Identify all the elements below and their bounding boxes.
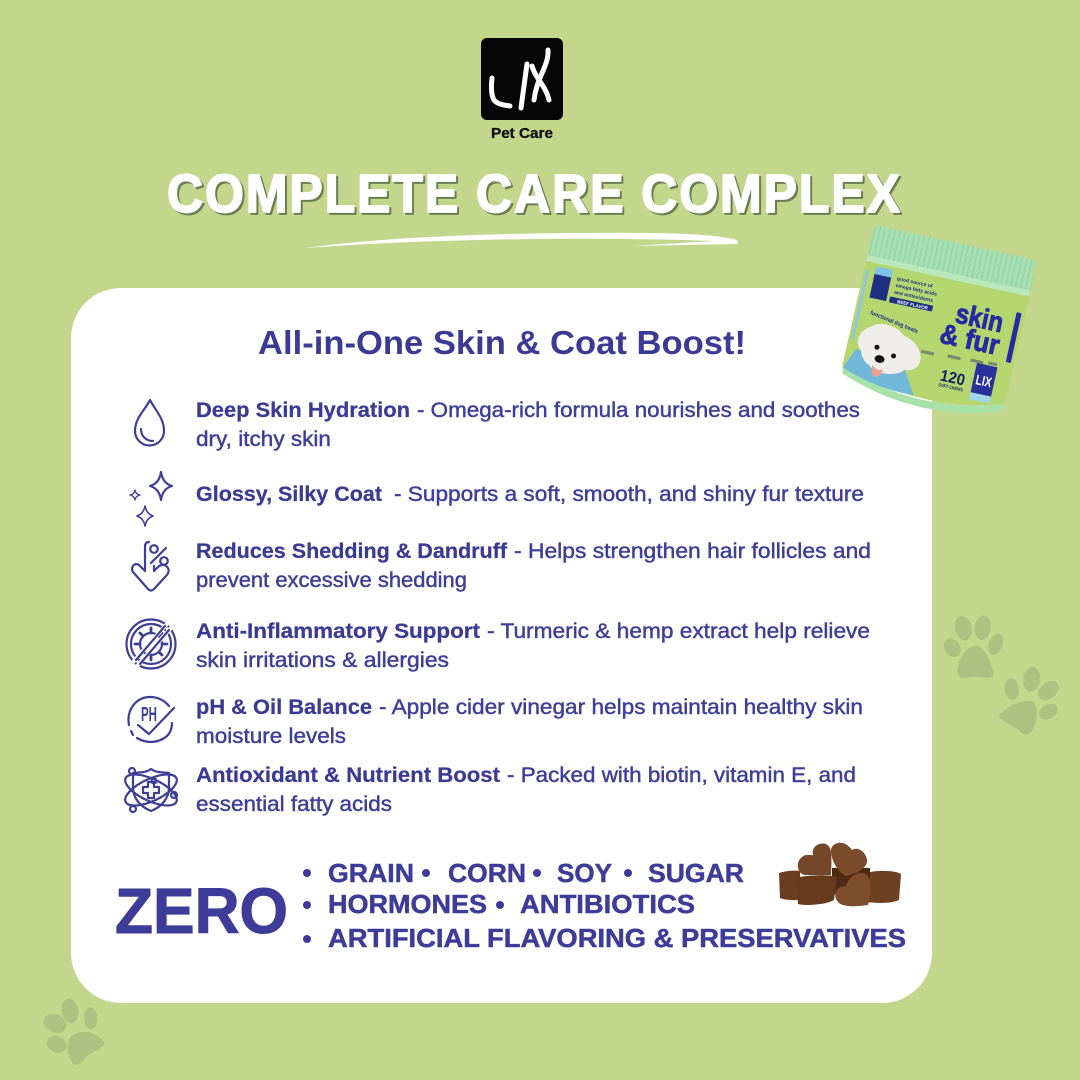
jar base xyxy=(837,365,1006,425)
benefit: anti-inflammatory: Anti-Inflammatory Support xyxy=(196,620,480,643)
icon: pH check xyxy=(129,697,174,742)
benefit: shedding: - Helps strengthen hair follicles and xyxy=(514,540,871,563)
benefit: pH balance: - Apple cider vinegar helps maintain healthy skin xyxy=(379,696,863,719)
paw print: right xyxy=(999,666,1062,735)
benefit: anti-inflammatory: skin irritations & allergies xyxy=(196,649,449,672)
benefit: pH balance: moisture levels xyxy=(196,725,346,748)
icon: no germs xyxy=(126,620,176,668)
benefit: antioxidant xyxy=(196,764,856,816)
jar label badge xyxy=(869,266,940,312)
benefit: glossy coat: Glossy, Silky Coat xyxy=(196,483,382,506)
jar logo xyxy=(969,363,997,404)
card xyxy=(71,288,932,1003)
jar side strip xyxy=(1006,312,1022,363)
jar body xyxy=(839,258,1030,416)
jar small claims xyxy=(921,347,997,369)
benefit: skin hydration: Deep Skin Hydration xyxy=(196,399,410,422)
benefit: antioxidant: - Packed with biotin, vitamin E, and xyxy=(507,764,856,787)
jar left label edge xyxy=(851,269,869,340)
jar label badge: omega fatty acids xyxy=(895,283,938,298)
benefit: glossy coat: - Supports a soft, smooth, and shiny fur texture xyxy=(394,483,864,506)
zero ingredient list: SUGAR xyxy=(648,858,744,888)
jar lid xyxy=(866,225,1037,297)
zero ingredient list: SOY xyxy=(557,858,612,888)
logo caption: Pet Care xyxy=(491,125,553,142)
jar product name: skin xyxy=(953,298,1006,338)
jar count: 120 xyxy=(939,368,967,390)
zero ingredient list: CORN xyxy=(448,858,526,888)
panel heading: All-in-One Skin & Coat Boost! xyxy=(258,324,746,361)
benefit: pH balance: pH & Oil Balance xyxy=(196,696,372,719)
paw print: upper right xyxy=(940,614,1006,678)
zero ingredient list: HORMONES xyxy=(328,889,487,919)
zero ingredient list: ANTIBIOTICS xyxy=(520,889,695,919)
zero ingredient list xyxy=(303,858,906,953)
icon: shedding down arrow with percent xyxy=(132,542,169,590)
heart treats xyxy=(779,843,901,906)
paw print: bottom left xyxy=(40,997,104,1065)
jar dog illustration xyxy=(840,317,927,395)
benefit: skin hydration: - Omega-rich formula nourishes and soothes xyxy=(417,399,860,422)
benefit: shedding xyxy=(196,540,871,592)
title: COMPLETE CARE COMPLEX xyxy=(169,166,902,226)
jar label badge: and antioxidants xyxy=(893,290,934,304)
jar label badge: BEEF FLAVOR xyxy=(897,299,929,311)
zero ingredient list: GRAIN xyxy=(328,858,414,888)
title: COMPLETE CARE COMPLEX xyxy=(167,164,900,224)
ZERO label: ZERO xyxy=(115,875,288,947)
icon: sparkles xyxy=(130,472,172,526)
benefit: anti-inflammatory: - Turmeric & hemp extract help relieve xyxy=(487,620,870,643)
benefit: glossy coat xyxy=(196,483,864,506)
benefit: skin hydration xyxy=(196,399,860,451)
icon: water drop xyxy=(135,400,164,446)
jar label badge: good source of xyxy=(896,276,933,290)
logo xyxy=(481,38,563,142)
benefit: skin hydration: dry, itchy skin xyxy=(196,428,331,451)
jar product name xyxy=(937,295,1007,361)
product jar: skin and fur xyxy=(837,225,1037,425)
benefit: antioxidant: Antioxidant & Nutrient Boost xyxy=(196,764,500,787)
jar tagline: functional dog treats xyxy=(869,310,919,335)
zero ingredient list: ARTIFICIAL FLAVORING & PRESERVATIVES xyxy=(328,923,906,953)
benefit: shedding: Reduces Shedding & Dandruff xyxy=(196,540,508,563)
benefit: anti-inflammatory xyxy=(196,620,870,672)
jar product name: & fur xyxy=(937,318,1003,361)
icon: antioxidant atom shield xyxy=(121,768,181,812)
icon: pH check: PH xyxy=(141,704,157,726)
title underline swoosh xyxy=(305,233,738,248)
jar count: SOFT CHEWS xyxy=(938,382,963,392)
benefit: pH balance xyxy=(196,696,863,748)
benefit: antioxidant: essential fatty acids xyxy=(196,793,392,816)
benefit: shedding: prevent excessive shedding xyxy=(196,569,467,592)
jar logo: LIX xyxy=(974,371,994,390)
